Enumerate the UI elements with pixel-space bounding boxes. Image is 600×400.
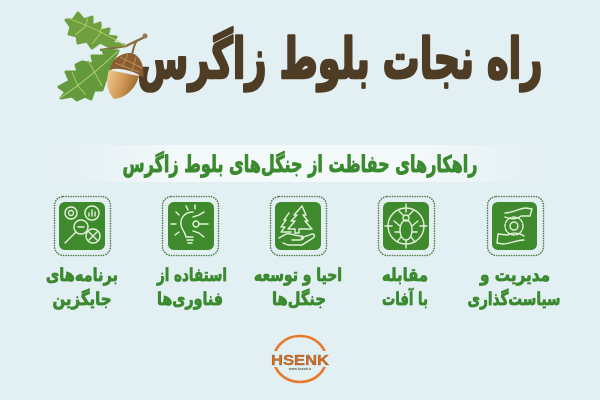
label: سیاست‌گذاری (468, 288, 560, 310)
label (46, 265, 118, 310)
icon: hand holding trees (270, 196, 326, 256)
logo: HSENK (270, 336, 330, 382)
label: جنگل‌ها (272, 288, 326, 310)
logo: HSENK: www.hsenk.ir (288, 367, 312, 371)
icon: gear chart magnifier (54, 196, 110, 256)
icon: hands with gear (488, 196, 544, 256)
icon: light bulb with circuit (162, 196, 218, 256)
illustration: oak leaves and acorn (59, 13, 148, 100)
label (156, 265, 227, 310)
icon: beetle in crosshair (378, 196, 434, 256)
label: فناوری‌ها (157, 289, 223, 310)
label (382, 265, 428, 310)
label: مدیریت و (479, 265, 550, 286)
panel: management and policy (468, 196, 560, 310)
banner (60, 145, 540, 182)
label (254, 265, 342, 310)
label (468, 265, 560, 310)
label: مقابله (382, 265, 428, 286)
label: جایگزین (52, 288, 112, 310)
panel: using technologies (156, 196, 227, 310)
panel: forest restoration (254, 196, 342, 310)
label: با آفات (382, 287, 428, 310)
label: احیا و توسعه (254, 265, 342, 286)
panel: pest control (378, 196, 434, 310)
logo: HSENK: HSENK (271, 352, 329, 369)
label: برنامه‌های (46, 265, 118, 286)
label: استفاده از (156, 265, 227, 286)
panel: planting programs (46, 196, 118, 310)
